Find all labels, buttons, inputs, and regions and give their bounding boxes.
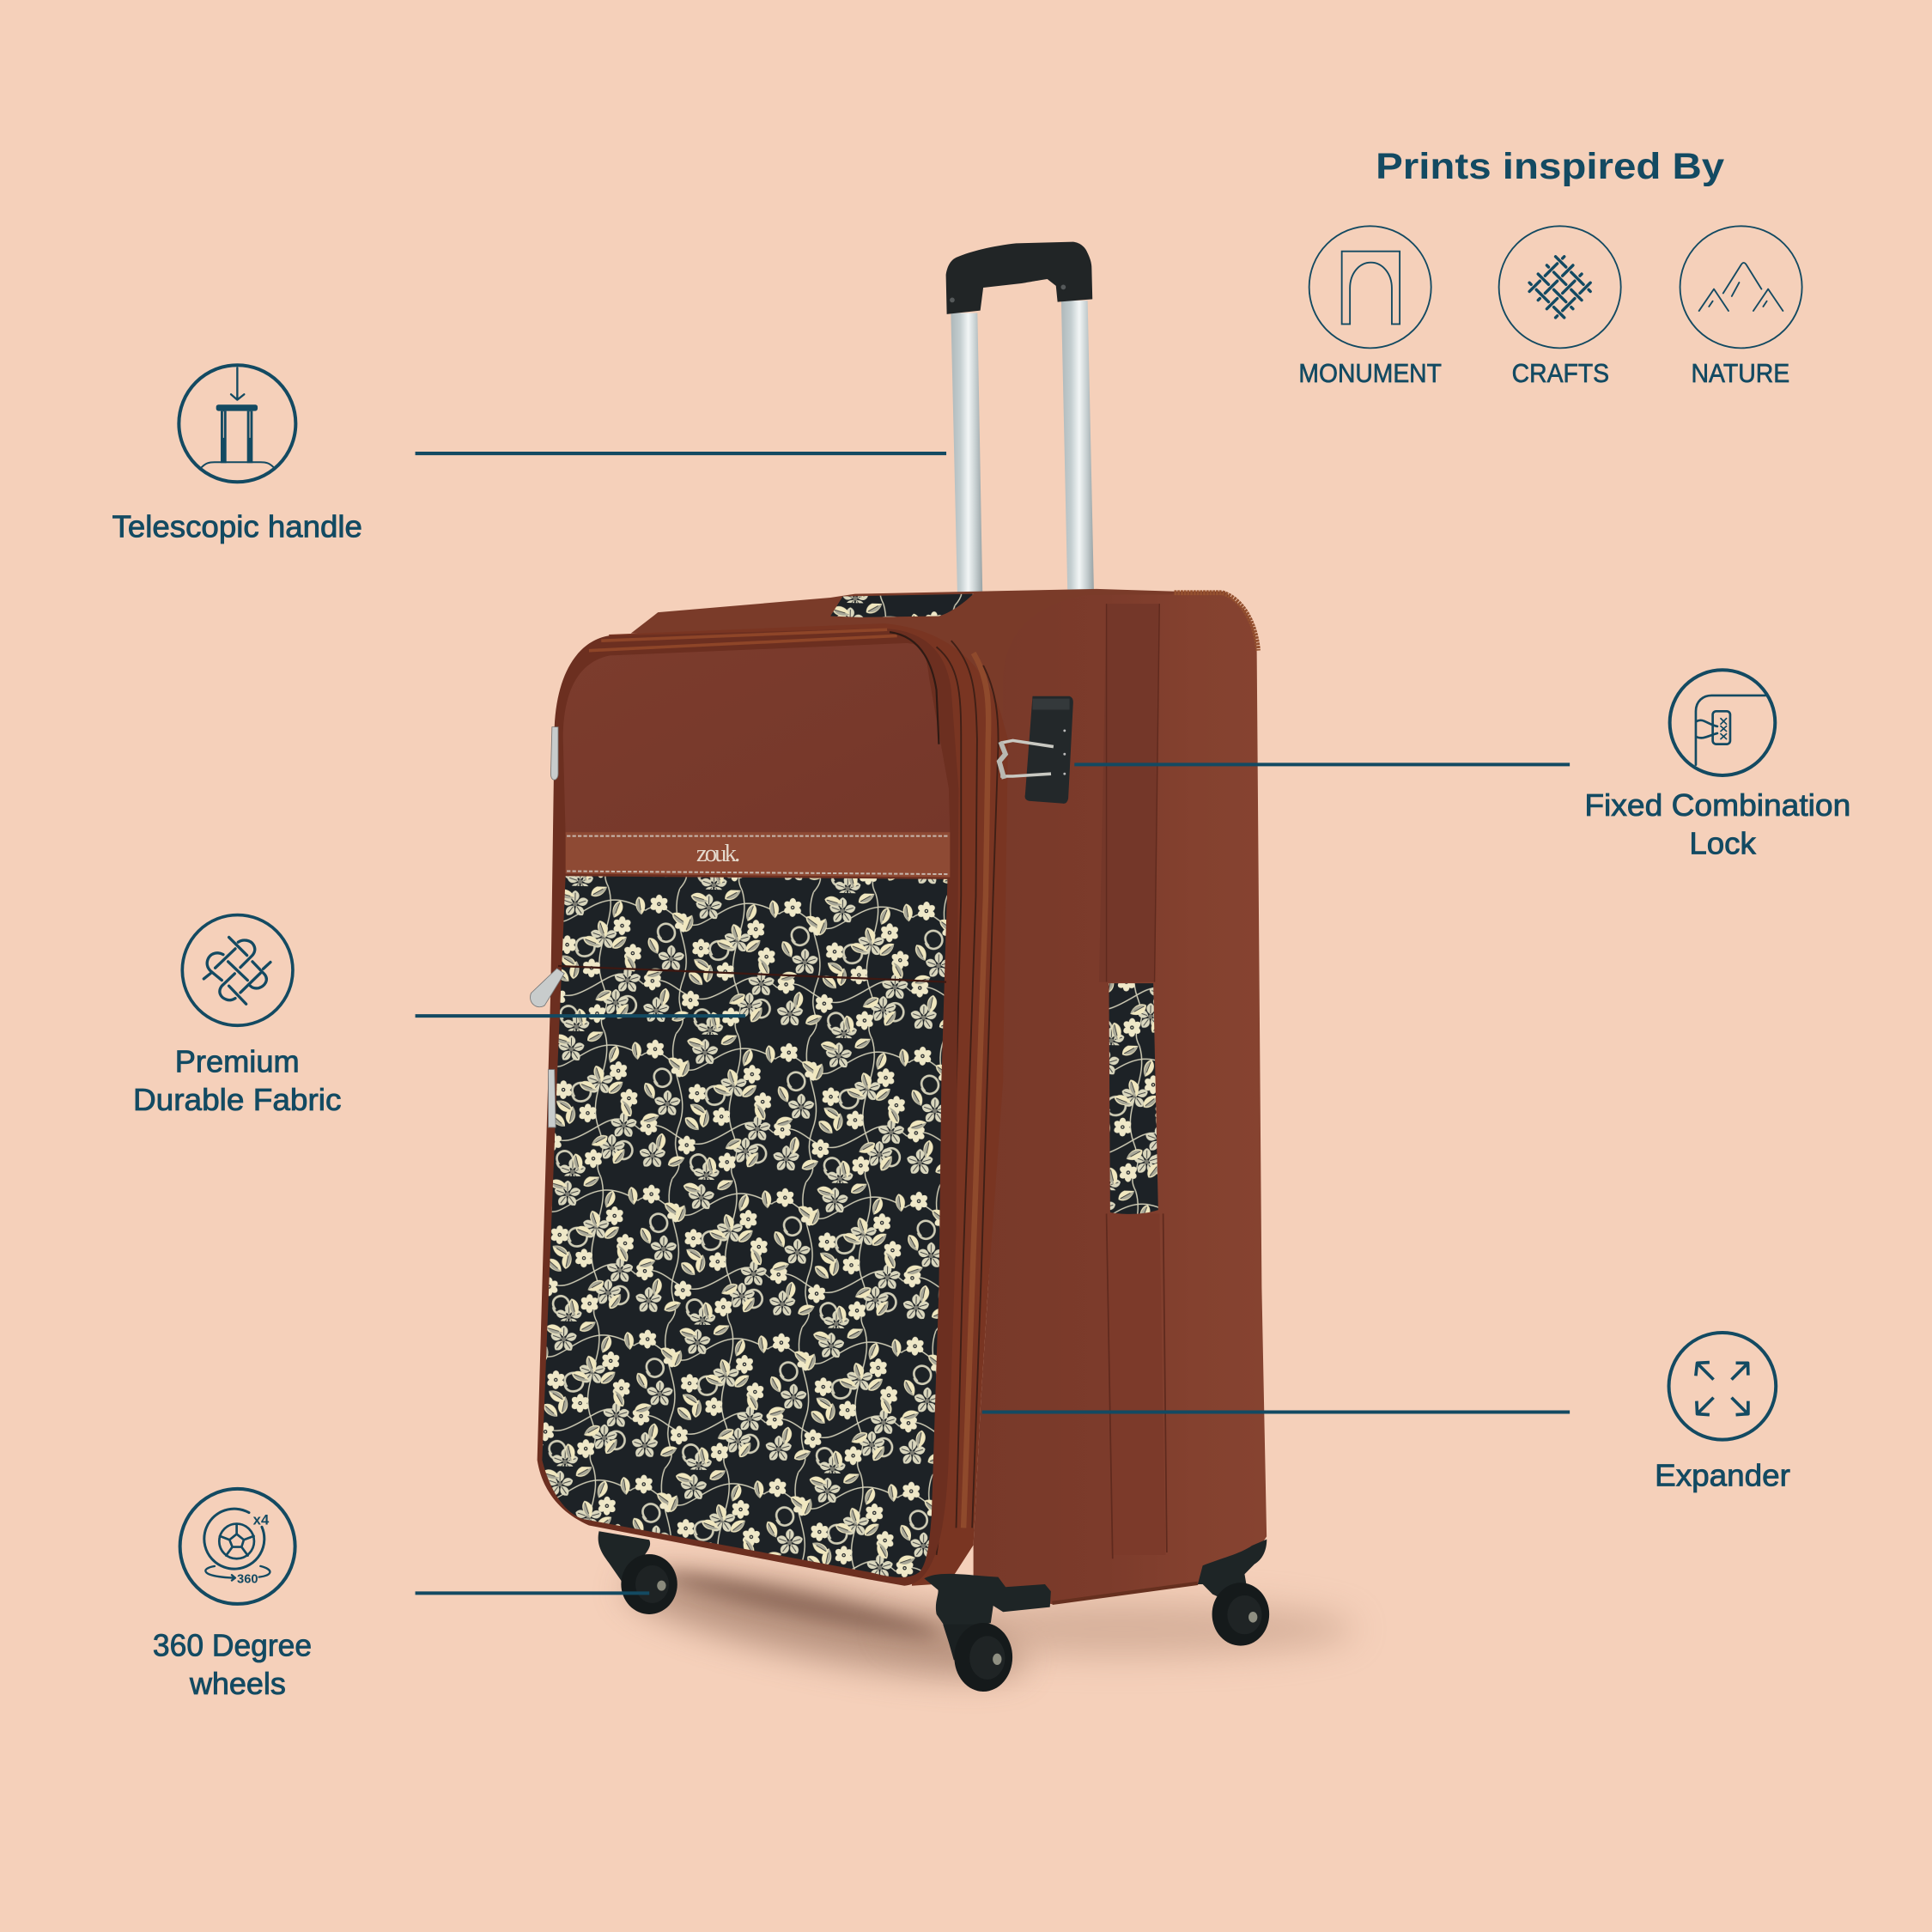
icon: expander bbox=[1669, 1333, 1776, 1440]
heading: prints inspired by: Prints inspired By bbox=[1376, 146, 1725, 186]
label: 360 degree wheels: wheels bbox=[189, 1667, 286, 1701]
label: premium durable fabric: Premium bbox=[175, 1044, 300, 1078]
icon: telescopic handle bbox=[179, 365, 295, 482]
zouk logo: zouk. bbox=[696, 840, 739, 867]
pocket zip line bbox=[558, 966, 946, 982]
pocket piping bbox=[589, 629, 897, 651]
top carry handle print bbox=[830, 594, 974, 617]
corner piping bbox=[1175, 592, 1258, 651]
combination lock bbox=[999, 696, 1073, 804]
floor shadow bbox=[619, 1552, 1355, 1697]
label: fixed combination lock: Lock bbox=[1689, 826, 1756, 860]
expander strap bbox=[1099, 604, 1159, 982]
connector: wheels bbox=[416, 1592, 649, 1595]
upper pocket panel bbox=[563, 643, 950, 834]
connector: telescopic handle bbox=[416, 453, 946, 454]
suitcase top surface bbox=[631, 589, 1244, 751]
label: 360 degree wheels bbox=[153, 1629, 312, 1701]
icon: nature bbox=[1680, 226, 1802, 348]
icon: 360 wheels: 360 bbox=[237, 1572, 258, 1586]
front right wheel bbox=[924, 1574, 1051, 1692]
icon: crafts bbox=[1499, 226, 1621, 348]
side carry handle bbox=[1109, 983, 1158, 1214]
label: monument: MONUMENT bbox=[1298, 360, 1442, 388]
handle grip bbox=[946, 242, 1092, 314]
connector: lock bbox=[1074, 763, 1570, 766]
label: crafts: CRAFTS bbox=[1512, 360, 1609, 388]
label: premium durable fabric: Durable Fabric bbox=[133, 1083, 341, 1117]
icon: monument bbox=[1309, 226, 1431, 348]
label: nature: NATURE bbox=[1691, 360, 1789, 388]
bottom edge piping bbox=[1052, 1583, 1198, 1603]
zipper band bbox=[609, 623, 1008, 1586]
front panel bbox=[538, 629, 958, 1586]
label: expander: Expander bbox=[1655, 1459, 1790, 1493]
floral print panel bbox=[542, 876, 947, 1577]
icon: 360 wheels: x4 bbox=[253, 1512, 270, 1528]
leather band bbox=[566, 832, 950, 878]
suitcase photo illustration bbox=[531, 242, 1269, 1692]
side panel bbox=[974, 594, 1267, 1604]
label: fixed combination lock bbox=[1584, 788, 1850, 860]
telescopic handle poles bbox=[951, 301, 1094, 594]
icon: combination lock bbox=[1670, 670, 1775, 775]
label: telescopic handle: Telescopic handle bbox=[112, 510, 362, 544]
label: premium durable fabric bbox=[133, 1044, 341, 1117]
connector: fabric bbox=[416, 1015, 745, 1018]
connector: expander bbox=[982, 1411, 1570, 1413]
label: fixed combination lock: Fixed Combination bbox=[1584, 788, 1850, 823]
back left wheel bbox=[598, 1531, 677, 1614]
icon: 360 wheels bbox=[180, 1489, 295, 1604]
zipper pulls bbox=[531, 727, 564, 1127]
icon: fabric weave bbox=[182, 915, 293, 1025]
rear right wheel bbox=[1198, 1540, 1269, 1646]
label: 360 degree wheels: 360 Degree bbox=[153, 1629, 312, 1663]
